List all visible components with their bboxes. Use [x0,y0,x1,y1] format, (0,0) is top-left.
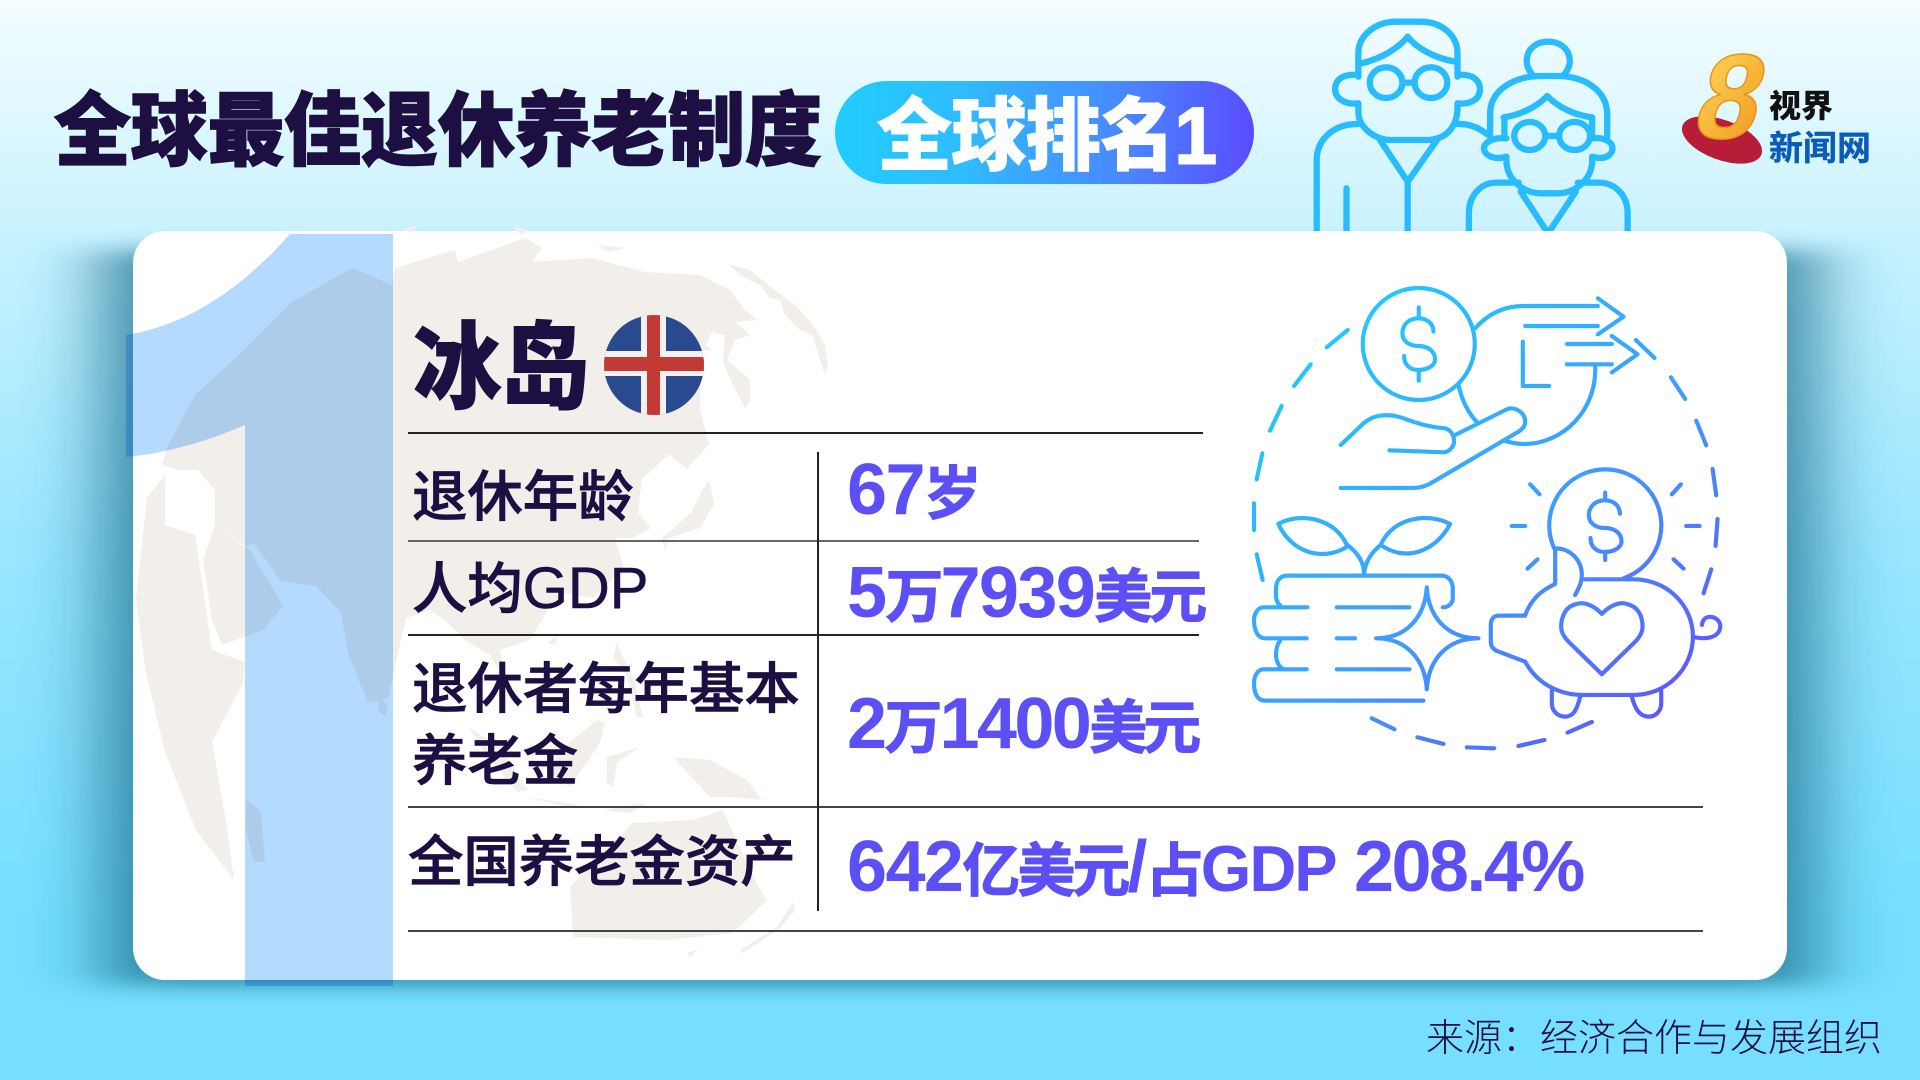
label: GDP per capita: 人均GDP [412,544,648,624]
value: pension assets: 642亿美元/占GDP 208.4% [847,824,1583,908]
badge: global rank 1: 全球排名1 [877,71,1216,187]
label: basic pension [412,644,800,796]
label: basic pension: 养老金 [412,716,578,796]
logo text top: 视界 [1769,81,1833,127]
heading: Iceland: 冰岛 [413,292,589,429]
value: basic pension: 2万1400美元 [847,681,1197,765]
label: basic pension: 退休者每年基本 [412,644,800,724]
source note: 来源：经济合作与发展组织 [1426,1007,1882,1062]
logo: 8 world news [1682,40,1871,170]
label: pension assets: 全国养老金资产 [408,817,796,897]
logo text bottom: 新闻网 [1769,121,1871,170]
title: 全球最佳退休养老制度 [54,67,822,183]
icon: Iceland flag [604,315,704,415]
value: GDP per capita: 5万7939美元 [847,550,1204,634]
panel: card [133,231,1787,980]
value: retirement age: 67岁 [847,447,979,531]
icon: elderly couple [1314,18,1631,231]
label: retirement age: 退休年龄 [412,452,634,532]
